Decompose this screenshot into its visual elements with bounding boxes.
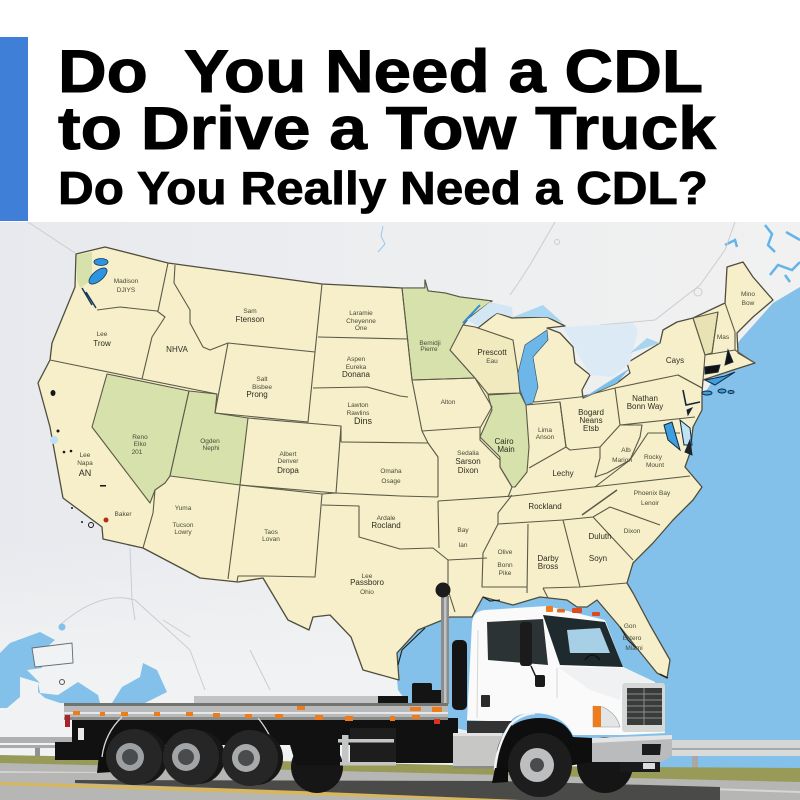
state labels: Lee: [80, 452, 91, 459]
state labels: Mas: [717, 334, 730, 341]
state labels: NHVA: [166, 345, 188, 354]
state labels: Tucson: [172, 522, 194, 529]
state labels: Rockland: [528, 502, 562, 511]
state labels: Estero: [623, 635, 642, 642]
state labels: Main: [497, 445, 515, 454]
state labels: Eureka: [346, 364, 367, 371]
truck: headlight: [593, 706, 620, 727]
state labels: Bay: [457, 527, 469, 534]
state labels: Lenoir: [641, 500, 660, 507]
truck: front bumper: [592, 735, 672, 772]
state: Wisconsin: [450, 325, 520, 394]
state labels: Dixon: [458, 466, 478, 475]
guard rails and roadside: [0, 737, 800, 800]
state labels: Prescott: [477, 348, 507, 357]
state labels: Laramie: [349, 310, 373, 317]
state: Minnesota: [402, 280, 492, 380]
land: United States outline: [38, 247, 773, 680]
state: Vermont: [693, 312, 718, 355]
truck: grille: [622, 683, 665, 732]
state labels: Omaha: [380, 468, 402, 475]
state labels: Lee: [362, 573, 373, 580]
state labels: [77, 278, 755, 652]
truck: step box: [453, 733, 503, 768]
state labels: Bisbee: [252, 384, 272, 391]
state labels: Denver: [278, 458, 299, 465]
truck: rear wheel 3: [222, 730, 283, 786]
state labels: Ian: [458, 542, 468, 549]
state labels: Phoenix Bay: [634, 490, 671, 497]
state labels: Eau: [486, 358, 498, 365]
state labels: Dins: [354, 416, 372, 426]
state labels: Olive: [498, 549, 513, 556]
state labels: Reno: [132, 434, 148, 441]
state labels: Duluth: [588, 532, 612, 541]
header white panel: [0, 0, 800, 222]
state labels: Ohio: [360, 589, 374, 596]
state labels: Pierre: [420, 346, 438, 353]
state labels: Cheyenne: [346, 318, 376, 325]
state labels: Marion: [612, 457, 632, 464]
green states: [77, 252, 718, 503]
background map base: [0, 222, 800, 800]
state labels: Elko: [134, 441, 147, 448]
state: Utah: [170, 391, 248, 485]
state labels: Miami: [625, 645, 643, 652]
state labels: Sarson: [455, 457, 481, 466]
state: Illinois: [480, 393, 529, 487]
blue accent bar: [0, 37, 28, 221]
state labels: Bonn Way: [627, 402, 663, 411]
state labels: Taos: [264, 529, 279, 536]
state labels: Passboro: [350, 578, 384, 587]
state: Washington inlet: [77, 252, 92, 288]
state labels: Aspen: [347, 356, 366, 363]
title line 2: to Drive a Tow Truck: [58, 95, 717, 162]
state labels: Alb: [621, 447, 631, 454]
state labels: Alton: [441, 399, 456, 406]
state labels: Bross: [538, 562, 558, 571]
state labels: Dixon: [624, 528, 641, 535]
tow truck: [55, 582, 672, 797]
state: Nevada: [92, 374, 189, 503]
truck: dark frame under cab: [467, 721, 512, 733]
state labels: Madison: [114, 278, 139, 285]
state labels: Sam: [243, 308, 257, 315]
Puget Sound water: [82, 258, 110, 308]
state labels: Lovan: [262, 536, 280, 543]
state labels: Salt: [256, 376, 268, 383]
truck: rear wheel 2: [163, 729, 225, 785]
state labels: Yuma: [175, 505, 192, 512]
truck: windshield: [543, 615, 623, 667]
truck: cab roof marker lights: [546, 606, 600, 616]
state labels: Lechy: [552, 469, 574, 478]
truck: door line and handle: [477, 630, 557, 718]
state labels: Bow: [742, 300, 755, 307]
state labels: Sedalia: [457, 450, 479, 457]
state labels: One: [355, 325, 368, 332]
state labels: Pike: [499, 570, 512, 577]
lower left pale background: [0, 540, 420, 760]
truck: load on bed: [194, 696, 378, 705]
Atlantic coast islands and bays: [664, 350, 735, 455]
truck: black chassis: [55, 718, 458, 765]
state labels: AN: [79, 468, 91, 478]
state labels: Mino: [741, 291, 755, 298]
Canada faint borders: [28, 222, 735, 690]
state labels: Napa: [77, 460, 93, 467]
state labels: Bonn: [497, 562, 513, 569]
truck: flatbed with marker lights: [64, 703, 448, 740]
state labels: Ftenson: [236, 315, 264, 324]
state labels: Mount: [646, 462, 664, 469]
state borders: [50, 263, 753, 612]
state labels: Prong: [246, 390, 268, 399]
state labels: Bogard: [578, 408, 604, 417]
state labels: Albert: [280, 451, 297, 458]
truck: front wheel arch: [495, 718, 592, 772]
truck: far front wheel: [577, 737, 633, 793]
map inset box: [32, 643, 73, 667]
state labels: Osage: [381, 478, 401, 485]
state labels: Etsb: [583, 424, 600, 433]
state labels: Cays: [666, 356, 684, 365]
truck: door window: [487, 619, 548, 665]
truck: exhaust stack: [436, 582, 450, 704]
state labels: Neans: [579, 416, 603, 425]
state labels: Lee: [97, 331, 108, 338]
state labels: Ardale: [377, 515, 396, 522]
state labels: Rocky: [644, 454, 663, 461]
state labels: Dropa: [277, 466, 299, 475]
northern water patches: [378, 225, 800, 282]
truck: front wheel: [508, 733, 572, 797]
state labels: Cairo: [494, 437, 514, 446]
state labels: Gon: [624, 623, 637, 630]
state labels: Nathan: [632, 394, 658, 403]
truck: front mudflap: [492, 768, 508, 783]
state labels: Lima: [538, 427, 552, 434]
state labels: Bemidji: [419, 340, 441, 347]
truck: side mirror: [520, 622, 545, 687]
state labels: Trow: [93, 339, 111, 348]
Gulf coast ink marks: [398, 597, 668, 678]
title line 1: Do You Need a CDL: [58, 38, 703, 105]
truck: hood shading: [558, 667, 655, 700]
Great Lakes: [463, 302, 660, 405]
subtitle: Do You Really Need a CDL?: [58, 162, 708, 214]
state labels: Darby: [537, 554, 559, 563]
state labels: Baker: [115, 511, 132, 518]
truck: equipment behind cab: [378, 640, 467, 710]
state labels: Donana: [342, 370, 371, 379]
state labels: Ogden: [200, 438, 220, 445]
truck: toolbox and step rail: [338, 728, 396, 766]
state labels: Rocland: [371, 521, 401, 530]
state labels: Lawton: [348, 402, 369, 409]
state labels: Nephi: [203, 445, 219, 452]
state labels: Soyn: [589, 554, 607, 563]
state labels: Lowry: [174, 529, 192, 536]
truck: fender trim: [495, 713, 535, 770]
truck: far rear wheel: [291, 741, 343, 793]
state labels: Rawlins: [347, 410, 370, 417]
Mexico water patches: [0, 624, 167, 708]
state labels: Anson: [536, 434, 555, 441]
state labels: 201: [132, 449, 143, 456]
truck: rear fenders: [102, 717, 278, 758]
truck: cab body: [467, 606, 665, 735]
truck: rear mudflap: [97, 745, 112, 773]
ocean: [392, 287, 800, 770]
state labels: DJIYS: [117, 287, 136, 294]
truck: rear wheel 1: [106, 729, 168, 785]
California coast marks: [50, 390, 108, 528]
